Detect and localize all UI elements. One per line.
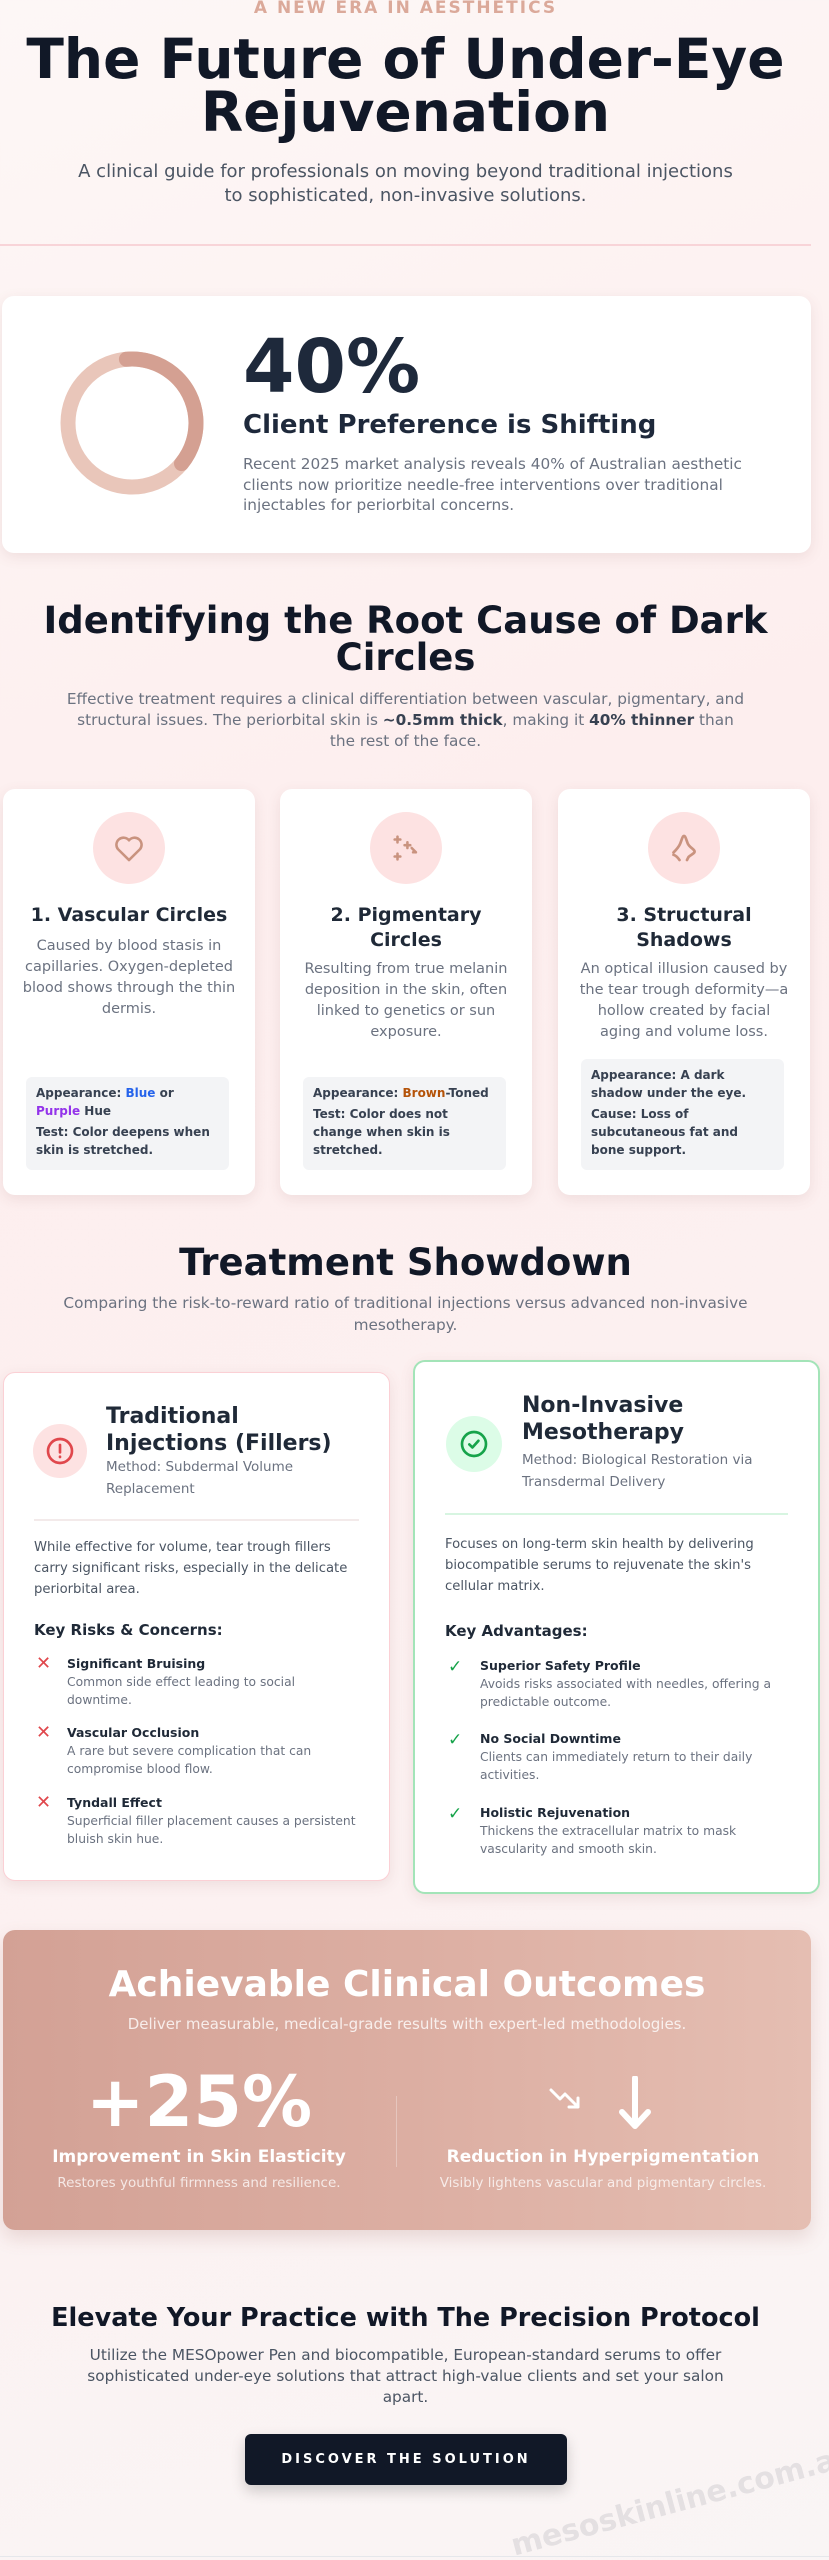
risk: tyndall: bluish skin hue. — [67, 1832, 163, 1846]
body text: biocompatible serums to rejuvenate the skin's — [445, 1558, 751, 1573]
info box: Appearance: Blue or — [36, 1086, 174, 1100]
title — [106, 1404, 332, 1456]
stat: elasticity: Restores youthful firmness and resilience. — [57, 2175, 341, 2191]
info box: Purple Hue — [36, 1104, 111, 1118]
subtitle: to sophisticated, non-invasive solutions. — [224, 185, 586, 206]
method: Replacement — [106, 1481, 195, 1497]
stat: elasticity — [52, 2061, 346, 2191]
advantage: holistic: Holistic Rejuvenation — [480, 1805, 630, 1820]
intro text: root cause — [67, 690, 744, 750]
advantage: holistic: Thickens the extracellular matrix to mask — [480, 1824, 736, 1838]
advantage: safety — [448, 1657, 771, 1709]
advantage: downtime: No Social Downtime — [480, 1731, 621, 1746]
advantage: holistic — [448, 1804, 736, 1856]
body text — [445, 1537, 754, 1594]
method: Method: Subdermal Volume — [106, 1459, 293, 1475]
heading: root cause: Circles — [336, 636, 475, 679]
info box — [581, 1059, 784, 1170]
card text: aging and volume loss. — [600, 1024, 768, 1040]
title: Injections (Fillers) — [106, 1431, 332, 1456]
card text: blood shows through the thin — [23, 980, 235, 996]
icon: sparkles — [370, 812, 442, 884]
body text: While effective for volume, tear trough fillers — [34, 1540, 331, 1555]
card text: the tear trough deformity—a — [580, 982, 788, 998]
intro text: root cause: Effective treatment requires a clinical differentiation between vascular, pigmentary, and — [67, 690, 744, 708]
risks heading: Key Risks & Concerns: — [34, 1621, 223, 1639]
method — [522, 1452, 752, 1490]
advantage: safety: predictable outcome. — [480, 1695, 611, 1709]
title: Mesotherapy — [522, 1420, 684, 1445]
body text — [34, 1540, 347, 1597]
intro text: root cause: the rest of the face. — [330, 732, 481, 750]
intro text: showdown: mesotherapy. — [354, 1316, 457, 1334]
info box: stretched. — [313, 1143, 383, 1157]
info box: bone support. — [591, 1143, 686, 1157]
card title: 1. Vascular Circles — [31, 904, 227, 926]
title: Rejuvenation — [201, 80, 610, 144]
info box: Test: Color deepens when — [36, 1125, 210, 1139]
advantage: safety: Avoids risks associated with needles, offering a — [480, 1677, 771, 1691]
card text — [580, 961, 788, 1040]
body text: Focuses on long-term skin health by delivering — [445, 1537, 754, 1552]
risk: tyndall: Tyndall Effect — [67, 1795, 162, 1810]
title — [26, 27, 785, 144]
advantages heading: Key Advantages: — [445, 1622, 588, 1640]
cta text: apart. — [383, 2388, 428, 2406]
donut chart 40% — [60, 352, 204, 494]
panel: pigmentary circles — [280, 789, 532, 1195]
card text: hollow created by facial — [598, 1003, 770, 1019]
panel: traditional injections — [3, 1372, 390, 1881]
card title — [331, 904, 482, 951]
info box: Appearance: A dark — [591, 1068, 725, 1082]
card text: An optical illusion caused by — [581, 961, 787, 977]
advantage: safety: ✓ — [448, 1657, 462, 1677]
card text: linked to genetics or sun — [317, 1003, 495, 1019]
card text: dermis. — [102, 1001, 156, 1017]
stat text: clients now prioritize needle-free interventions over traditional — [243, 476, 723, 494]
card text — [23, 938, 235, 1017]
info box — [303, 1077, 506, 1170]
stat: hyperpigmentation: Visibly lightens vascular and pigmentary circles. — [440, 2175, 766, 2191]
stat: hyperpigmentation — [440, 2076, 766, 2191]
intro text: showdown: Comparing the risk-to-reward ratio of traditional injections versus advanced non-invasive — [63, 1294, 748, 1312]
subtitle — [78, 161, 733, 206]
advantage: downtime: Clients can immediately return to their daily — [480, 1750, 752, 1764]
risk: occlusion: A rare but severe complication that can — [67, 1744, 311, 1758]
cta text — [87, 2346, 724, 2406]
icon: star shape — [648, 812, 720, 884]
stat: elasticity: Improvement in Skin Elasticity — [52, 2147, 346, 2167]
card text — [305, 961, 507, 1040]
risk list — [36, 1653, 356, 1846]
card text: exposure. — [370, 1024, 442, 1040]
cta text: Utilize the MESOpower Pen and biocompatible, European-standard serums to offer — [90, 2346, 721, 2364]
info box: skin is stretched. — [36, 1143, 153, 1157]
stat heading: Client Preference is Shifting — [243, 410, 656, 440]
icon: warning — [33, 1424, 87, 1478]
risk: occlusion: Vascular Occlusion — [67, 1725, 199, 1740]
icon: downward arrows — [550, 2076, 651, 2129]
risk: bruising: ✕ — [36, 1653, 51, 1674]
title: Non-Invasive — [522, 1393, 683, 1418]
method — [106, 1459, 293, 1497]
big stat: 40% — [243, 324, 420, 410]
card text: capillaries. Oxygen-depleted — [25, 959, 233, 975]
panel: clinical outcomes — [3, 1930, 811, 2230]
risk: bruising: downtime. — [67, 1693, 132, 1707]
cta text: sophisticated under-eye solutions that attract high-value clients and set your salon — [87, 2367, 724, 2385]
advantage: holistic: vascularity and smooth skin. — [480, 1842, 657, 1856]
panel: client preference stat — [2, 296, 811, 553]
risk: bruising — [36, 1653, 295, 1707]
card title: 2. Pigmentary — [331, 904, 481, 926]
info box: Appearance: Brown-Toned — [313, 1086, 489, 1100]
advantage list — [448, 1657, 771, 1856]
risk: tyndall: Superficial filler placement causes a persistent — [67, 1814, 356, 1828]
card text: Resulting from true melanin — [305, 961, 507, 977]
risk: occlusion — [36, 1722, 311, 1776]
title: The Future of Under-Eye — [26, 27, 785, 91]
risk: tyndall: ✕ — [36, 1792, 51, 1813]
heading: call to action: Elevate Your Practice with The Precision Protocol — [51, 2303, 760, 2333]
outcomes subtitle: Deliver measurable, medical-grade results with expert-led methodologies. — [128, 2015, 686, 2033]
body text: periorbital area. — [34, 1582, 140, 1597]
outcomes title: Achievable Clinical Outcomes — [109, 1964, 705, 2005]
stat text: Recent 2025 market analysis reveals 40% of Australian aesthetic — [243, 455, 742, 473]
advantage: downtime: activities. — [480, 1768, 539, 1782]
stat text — [243, 455, 742, 514]
card text: deposition in the skin, often — [305, 982, 507, 998]
panel: structural shadows — [558, 789, 810, 1195]
card title: Shadows — [636, 929, 732, 951]
heading: root cause: Identifying the Root Cause of Dark — [44, 599, 767, 642]
panel: vascular circles — [3, 789, 255, 1195]
method: Transdermal Delivery — [522, 1474, 665, 1490]
advantage: downtime: ✓ — [448, 1730, 462, 1750]
card title: 3. Structural — [616, 904, 752, 926]
info box: shadow under the eye. — [591, 1086, 746, 1100]
title: Traditional — [106, 1404, 239, 1429]
info box: change when skin is — [313, 1125, 450, 1139]
intro text: showdown — [63, 1294, 748, 1334]
button: DISCOVER THE SOLUTION — [281, 2452, 531, 2467]
icon: check circle — [446, 1416, 502, 1472]
advantage: holistic: ✓ — [448, 1804, 462, 1824]
body text: carry significant risks, especially in the delicate — [34, 1561, 347, 1576]
card text: Caused by blood stasis in — [37, 938, 221, 954]
stat: hyperpigmentation: Reduction in Hyperpigmentation — [447, 2147, 759, 2167]
card title — [616, 904, 752, 951]
risk: tyndall — [36, 1792, 356, 1846]
info box: Test: Color does not — [313, 1107, 448, 1121]
advantage: downtime — [448, 1730, 752, 1782]
title — [522, 1393, 684, 1445]
icon: heart — [93, 812, 165, 884]
risk: bruising: Common side effect leading to social — [67, 1675, 295, 1689]
heading: root cause — [44, 599, 768, 679]
panel: non-invasive mesotherapy — [413, 1360, 820, 1894]
body text: cellular matrix. — [445, 1579, 545, 1594]
method: Method: Biological Restoration via — [522, 1452, 752, 1468]
advantage: safety: Superior Safety Profile — [480, 1658, 641, 1673]
heading: treatment showdown: Treatment Showdown — [179, 1241, 632, 1284]
risk: bruising: Significant Bruising — [67, 1656, 205, 1671]
info box — [26, 1077, 229, 1170]
risk: occlusion: compromise blood flow. — [67, 1762, 213, 1776]
card title: Circles — [370, 929, 442, 951]
info box: subcutaneous fat and — [591, 1125, 738, 1139]
info box: Cause: Loss of — [591, 1107, 689, 1121]
intro text: root cause: structural issues. The periorbital skin is ~0.5mm thick, making it 40% thinner than — [77, 711, 734, 729]
button — [245, 2434, 567, 2485]
stat text: injectables for periorbital concerns. — [243, 496, 514, 514]
stat: elasticity: +25% — [86, 2061, 312, 2143]
risk: occlusion: ✕ — [36, 1722, 51, 1743]
subtitle: A clinical guide for professionals on moving beyond traditional injections — [78, 161, 733, 182]
